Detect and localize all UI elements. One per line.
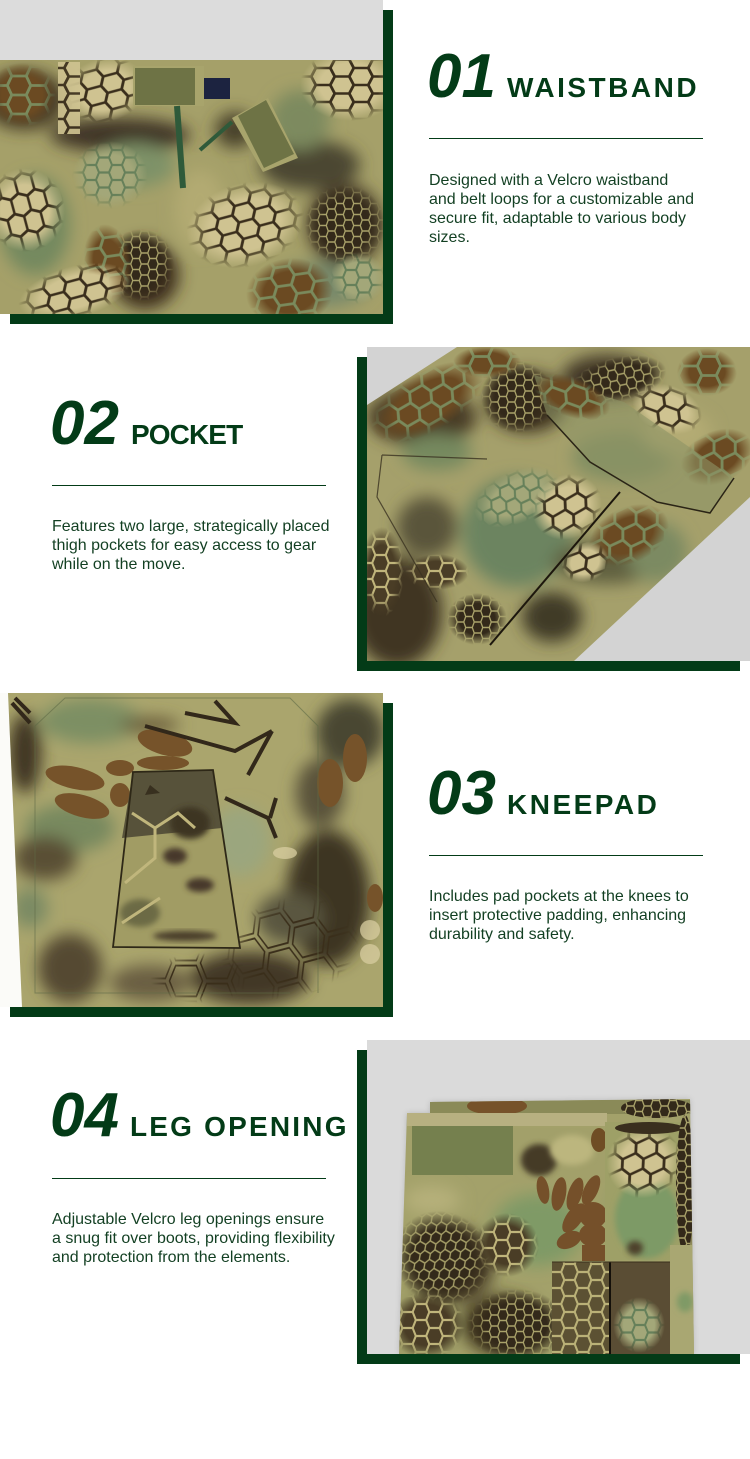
heading: 03 kneepad: KNEEPAD <box>507 789 659 820</box>
frame: leg opening photo <box>357 1050 740 1364</box>
velcro tab: waistband left <box>135 68 195 105</box>
heading: 02 pocket <box>50 389 243 458</box>
pocket flap <box>534 375 734 513</box>
heading: 01 waistband <box>427 42 699 111</box>
text: leg opening description <box>52 1211 335 1266</box>
text: kneepad description: insert protective padding, enhancing <box>429 907 686 924</box>
heading: 04 leg opening: 04 <box>50 1081 119 1150</box>
brown camo patches <box>43 724 383 912</box>
heading: 01 waistband: WAISTBAND <box>507 72 699 103</box>
leg flap <box>518 1128 605 1180</box>
text: waistband description: Designed with a Velcro waistband <box>429 172 668 189</box>
right leg panel <box>605 1122 680 1260</box>
text: pocket description <box>52 518 329 573</box>
photo: leg opening <box>367 1040 750 1354</box>
brown camo fan <box>535 1173 607 1261</box>
pocket slit <box>490 492 620 645</box>
text: waistband description: sizes. <box>429 229 470 246</box>
heading: 02 pocket: POCKET <box>131 419 242 450</box>
text: pocket description: thigh pockets for easy access to gear <box>52 537 316 554</box>
panel: 03 kneepad <box>8 693 703 1017</box>
text: leg opening description: a snug fit over boots, providing flexibility <box>52 1230 335 1247</box>
panel: 02 pocket <box>50 347 750 671</box>
heading: 01 waistband: 01 <box>427 42 496 111</box>
text: pocket description: Features two large, strategically placed <box>52 518 329 535</box>
knee pad pocket <box>113 770 240 948</box>
text: waistband description: secure fit, adaptable to various body <box>429 210 686 227</box>
photo: pocket <box>367 347 750 661</box>
text: kneepad description: durability and safety. <box>429 926 575 943</box>
zipper <box>177 106 183 188</box>
frame: pocket photo <box>357 357 740 671</box>
text: kneepad description: Includes pad pockets at the knees to <box>429 888 689 905</box>
cream cells <box>273 847 380 964</box>
heading: 04 leg opening: LEG OPENING <box>130 1111 349 1142</box>
heading: 04 leg opening <box>50 1081 349 1150</box>
dark camo veins <box>12 698 276 838</box>
panel: 01 waistband <box>0 0 703 324</box>
heading: 02 pocket: 02 <box>50 389 119 458</box>
text: leg opening description: and protection from the elements. <box>52 1249 290 1266</box>
heading: 03 kneepad <box>427 759 659 828</box>
velcro tab: waistband right <box>232 98 298 172</box>
text: waistband description: and belt loops for a customizable and <box>429 191 694 208</box>
panel: 04 leg opening <box>50 1040 750 1364</box>
text: waistband description <box>429 172 694 246</box>
photo: waistband <box>0 0 383 314</box>
velcro strip <box>412 1126 513 1175</box>
text: pocket description: while on the move. <box>52 556 185 573</box>
label: garment tag <box>204 78 230 99</box>
text: kneepad description <box>429 888 689 943</box>
photo: kneepad <box>8 693 383 1007</box>
text: leg opening description: Adjustable Velcro leg openings ensure <box>52 1211 324 1228</box>
heading: 03 kneepad: 03 <box>427 759 496 828</box>
frame: kneepad photo <box>10 703 393 1017</box>
frame: waistband photo <box>10 10 393 324</box>
bottom pocket <box>552 1262 670 1354</box>
